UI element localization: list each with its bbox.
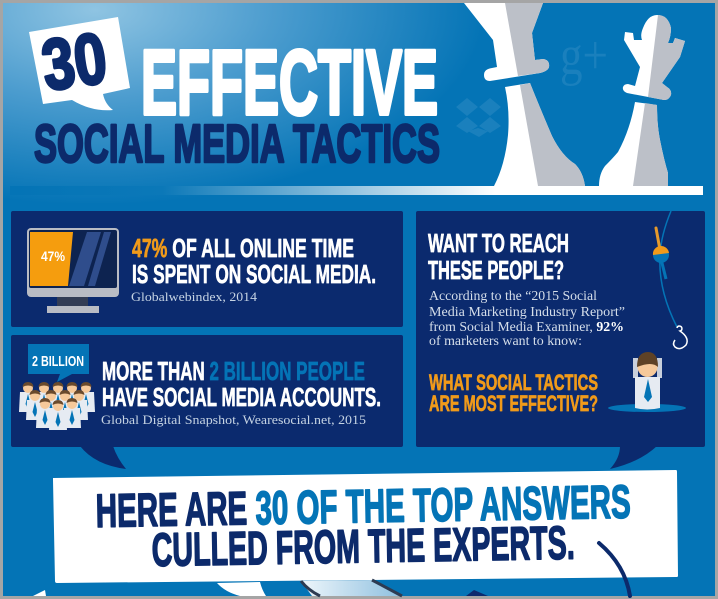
tail <box>610 446 657 469</box>
icon: monitor <box>27 228 119 313</box>
heading line 1: WANT TO REACH <box>428 228 569 258</box>
small white shape <box>33 590 46 596</box>
panel: 2 billion <box>11 335 403 469</box>
number 30: 30 <box>37 18 112 106</box>
title: social media tactics: SOCIAL MEDIA TACTICS <box>34 114 440 174</box>
heading line 2: THESE PEOPLE? <box>428 255 564 285</box>
faint icon: google plus: g+ <box>560 25 608 87</box>
source: Globalwebindex, 2014 <box>131 290 258 304</box>
panel: 47 percent <box>11 211 403 327</box>
body text: Media Marketing Industry Report” <box>429 304 625 319</box>
header gradient <box>3 3 715 203</box>
icon: large chess piece <box>464 3 585 186</box>
bubble tail below banner <box>217 582 266 596</box>
stat text line 1: 47% OF ALL ONLINE TIME <box>132 233 354 263</box>
arrow curve <box>599 543 630 596</box>
speech bubble: 30 <box>29 17 130 110</box>
panel: want to reach <box>416 211 705 469</box>
body text: According to the “2015 Social <box>429 288 597 303</box>
icon: device corner <box>301 580 402 596</box>
question line 2: ARE MOST EFFECTIVE? <box>429 391 598 416</box>
callout: 2 billion: 2 BILLION <box>32 353 84 370</box>
banner: top answers <box>53 470 678 583</box>
stat text line 2: HAVE SOCIAL MEDIA ACCOUNTS. <box>102 382 381 412</box>
question line 1: WHAT SOCIAL TACTICS <box>429 370 598 395</box>
stat text line 2: IS SPENT ON SOCIAL MEDIA. <box>132 259 376 289</box>
faint icon: dropbox <box>456 98 501 137</box>
icon: small chess piece <box>599 15 685 186</box>
body text: of marketers want to know: <box>429 333 582 348</box>
small dark shape <box>466 590 488 596</box>
icon: hook <box>674 326 687 349</box>
title: effective: EFFECTIVE <box>141 32 438 134</box>
tail <box>80 446 126 469</box>
body text <box>429 288 625 348</box>
source: Global Digital Snapshot, Wearesocial.net, 2015 <box>101 413 366 427</box>
header rule <box>10 186 703 195</box>
monitor label: 47% <box>41 248 65 264</box>
icon: person in hole <box>608 352 686 412</box>
body text: from Social Media Examiner, 92% <box>429 319 624 334</box>
callout: 2 billion <box>28 344 89 382</box>
icon: crowd of people <box>19 382 95 430</box>
stat text line 1: MORE THAN 2 BILLION PEOPLE <box>102 356 365 386</box>
icon: fishing line and float <box>653 211 677 327</box>
